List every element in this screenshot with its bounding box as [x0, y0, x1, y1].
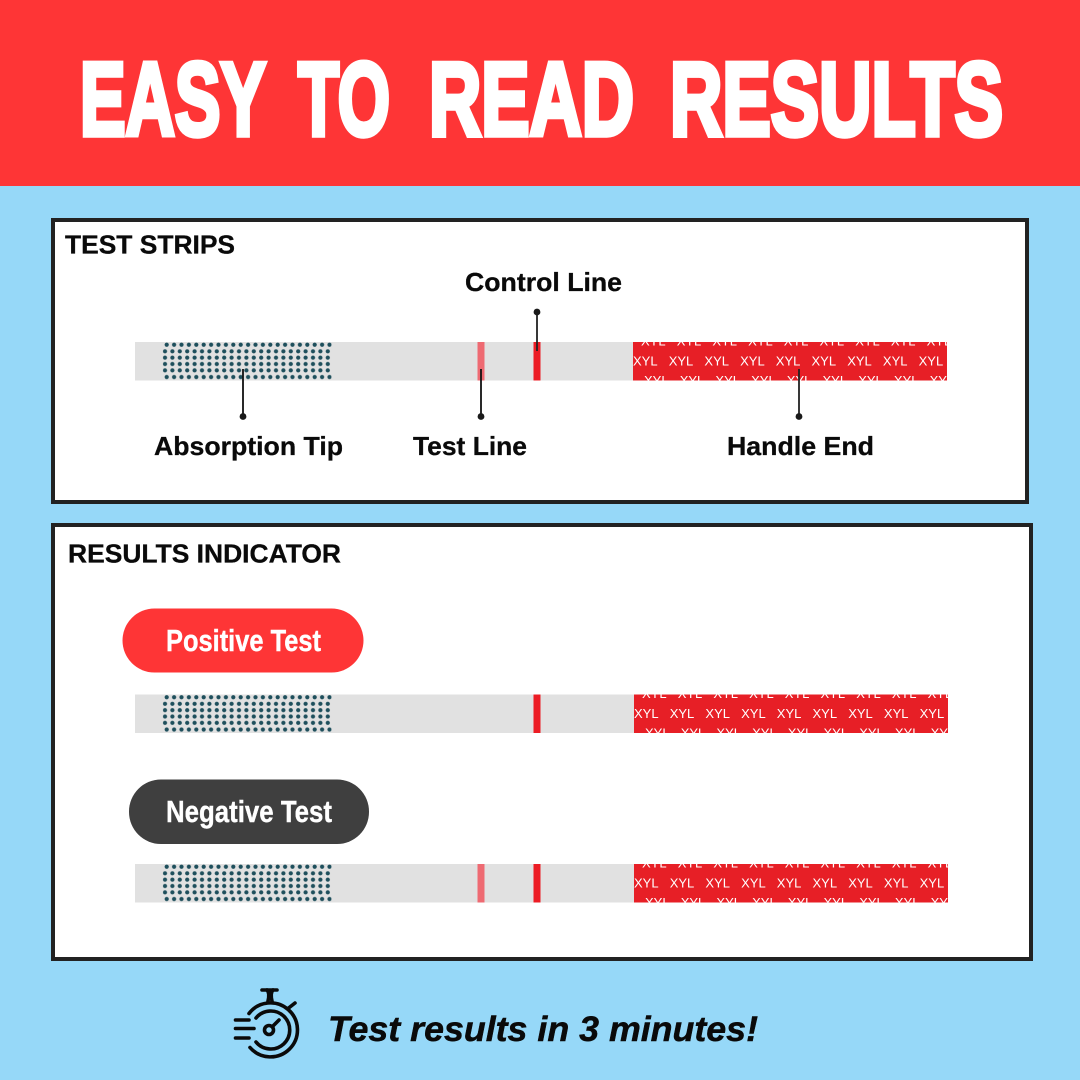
strip: negative result — [135, 864, 948, 902]
title — [80, 42, 1003, 158]
title: READ — [429, 42, 634, 158]
strip: negative result: XYL XYL XYL XYL XYL XYL XYL XYL XYL — [645, 895, 955, 910]
panel: results indicator — [53, 525, 1031, 959]
badge: positive test: Positive Test — [166, 623, 321, 658]
strip: positive result: XYL XYL XYL XYL XYL XYL XYL XYL XYL — [634, 706, 944, 721]
badge: negative test: Negative Test — [166, 794, 332, 829]
strip: negative result: XYL XYL XYL XYL XYL XYL XYL XYL XYL — [642, 856, 952, 871]
icon: stopwatch — [236, 990, 297, 1057]
heading: results indicator: RESULTS INDICATOR — [68, 538, 341, 568]
strip diagram: XYL XYL XYL XYL XYL XYL XYL XYL XYL — [633, 353, 943, 368]
title: TO — [298, 42, 390, 158]
heading: test strips: TEST STRIPS — [65, 230, 235, 260]
strip: positive result — [135, 694, 948, 733]
callout: handle end — [727, 369, 874, 461]
badge: positive test — [122, 608, 364, 672]
callout: test line — [413, 369, 527, 461]
badge: negative test — [129, 780, 369, 844]
panel: test strips — [53, 220, 1027, 502]
callout: control line — [465, 267, 622, 351]
strip: positive result: XYL XYL XYL XYL XYL XYL XYL XYL XYL — [642, 686, 952, 701]
callout: handle end: Handle End — [727, 431, 874, 461]
callout: absorption tip: Absorption Tip — [154, 431, 343, 461]
strip diagram: XYL XYL XYL XYL XYL XYL XYL XYL XYL — [644, 373, 954, 388]
callout: absorption tip — [154, 369, 343, 461]
callout: control line: Control Line — [465, 267, 622, 297]
title: EASY — [80, 42, 266, 158]
tagline: Test results in 3 minutes! — [328, 1010, 758, 1049]
strip: negative result: XYL XYL XYL XYL XYL XYL XYL XYL XYL — [634, 875, 944, 890]
callout: test line: Test Line — [413, 431, 527, 461]
strip diagram — [135, 342, 947, 380]
strip: positive result: XYL XYL XYL XYL XYL XYL XYL XYL XYL — [645, 726, 955, 740]
strip diagram: XYL XYL XYL XYL XYL XYL XYL XYL XYL — [641, 334, 951, 349]
title banner — [0, 0, 1080, 186]
